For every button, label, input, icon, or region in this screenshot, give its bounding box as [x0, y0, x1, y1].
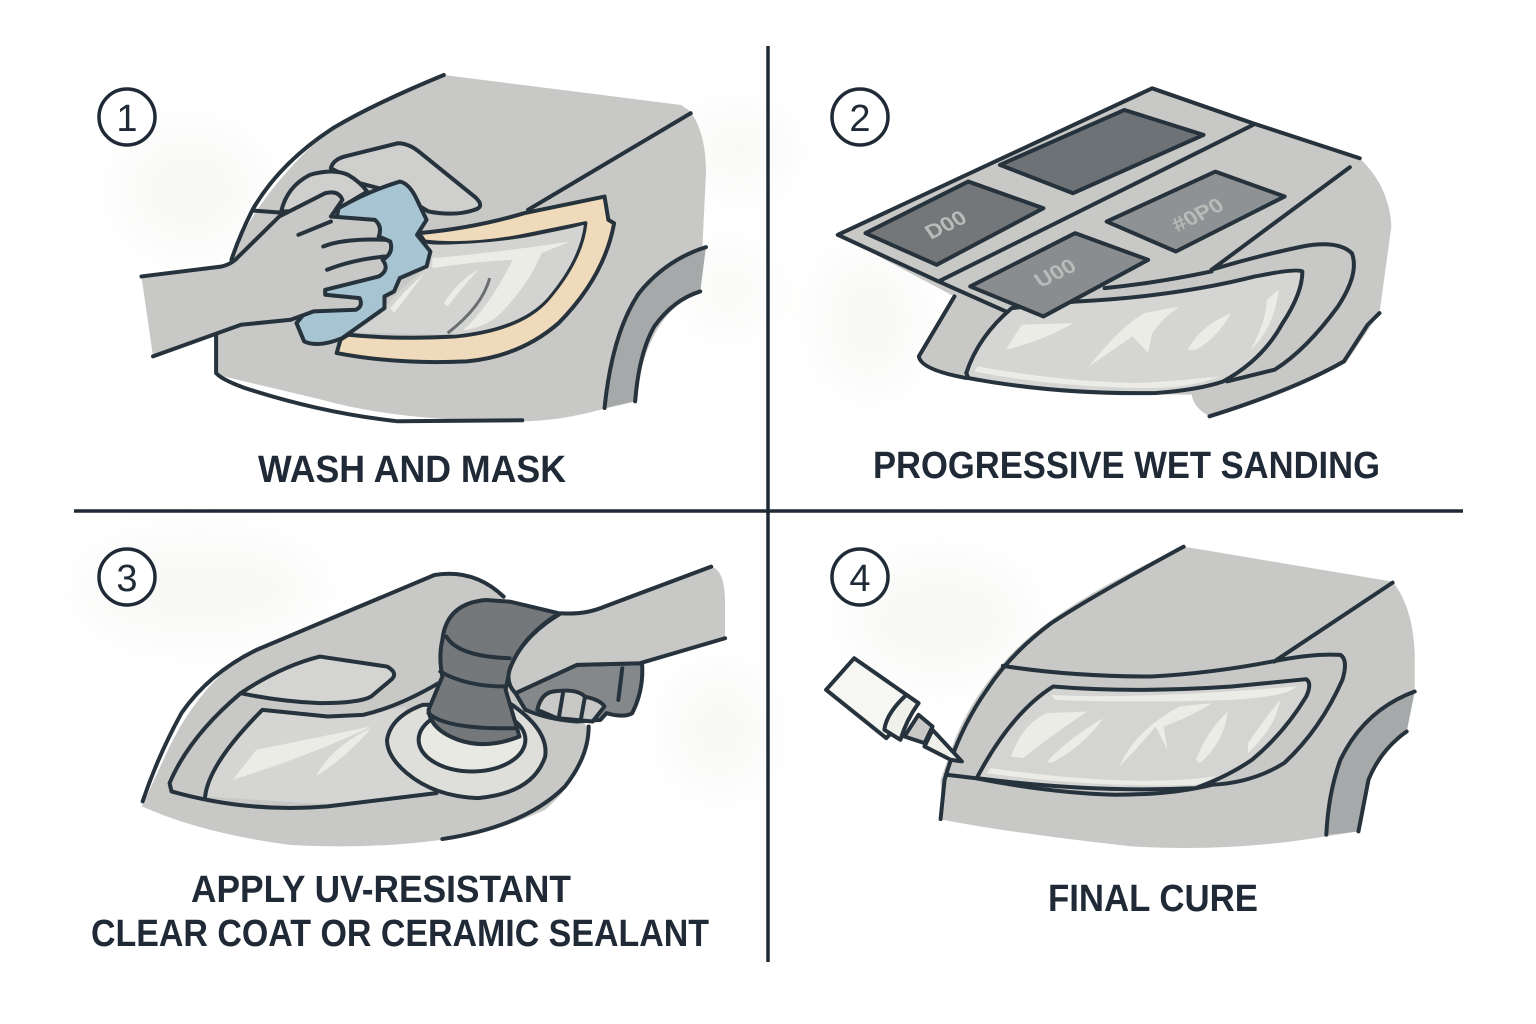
masking tape — [337, 197, 614, 362]
vertical divider — [766, 46, 770, 962]
car illustration 4 — [826, 547, 1415, 848]
number 3 — [99, 549, 155, 605]
arm — [508, 567, 725, 693]
car illustration 3 — [142, 567, 725, 846]
fingers — [537, 691, 604, 721]
number 4 — [832, 549, 888, 605]
polisher — [429, 600, 559, 744]
car body — [941, 547, 1415, 848]
hand — [141, 192, 391, 356]
sandpaper sheets: D00 — [920, 206, 971, 244]
number 3: 3 — [116, 558, 138, 600]
sandpaper sheets: #0P0 — [1167, 193, 1228, 236]
car body — [142, 574, 589, 846]
mirror — [331, 143, 480, 214]
horizontal divider — [74, 509, 1463, 513]
panel: step 2 progressive wet sanding — [832, 88, 1391, 487]
upper lamp — [241, 657, 394, 703]
number 1: 1 — [116, 98, 138, 140]
heading 2: PROGRESSIVE WET SANDING — [873, 445, 1380, 487]
polishing pad — [387, 703, 546, 798]
number 2 — [832, 89, 888, 145]
heading 4: FINAL CURE — [1048, 878, 1258, 920]
headlight lens — [977, 679, 1309, 789]
glue bottle — [826, 658, 962, 761]
sandpaper sheets — [865, 110, 1285, 316]
heading 3 line 2: CLEAR COAT OR CERAMIC SEALANT — [91, 913, 709, 955]
cloth — [296, 182, 430, 344]
headlight lens — [352, 225, 584, 335]
panel: step 4 final cure — [826, 547, 1415, 920]
sandpaper sheets: U00 — [1030, 254, 1081, 292]
heading 1: WASH AND MASK — [258, 449, 567, 491]
number 4: 4 — [849, 558, 871, 600]
car illustration 1 — [141, 75, 706, 421]
headlight lens — [966, 271, 1302, 393]
car body — [838, 88, 1391, 416]
number 2: 2 — [849, 98, 871, 140]
panel: step 1 wash and mask — [99, 75, 706, 491]
number 1 — [99, 89, 155, 145]
panel: step 3 apply clear coat — [91, 549, 725, 955]
heading 3 line 1: APPLY UV-RESISTANT — [191, 869, 571, 911]
hand grip — [516, 663, 642, 721]
car illustration 2 — [838, 88, 1391, 416]
headlight lens — [205, 707, 434, 803]
car body — [216, 75, 706, 421]
